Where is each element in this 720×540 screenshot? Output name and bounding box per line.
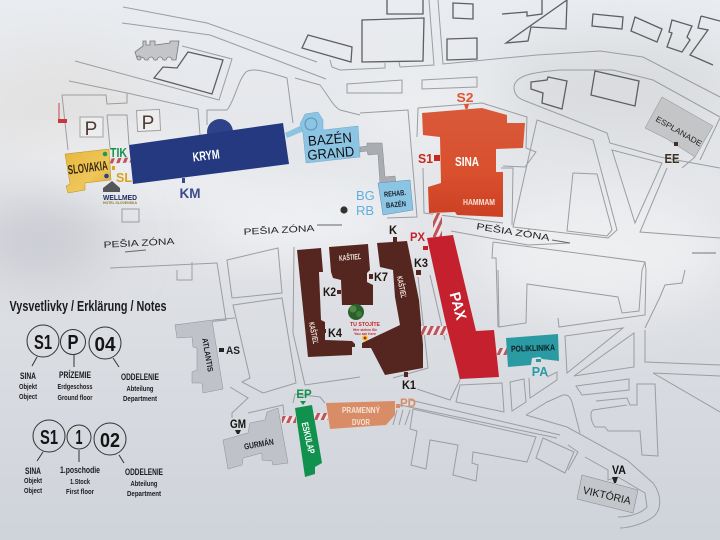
building: Kaštieľ: KAŠTIEĽ [395, 275, 408, 299]
labels: Kaštieľ entrances: K1 [402, 378, 416, 392]
building: Rehab bazén [378, 180, 413, 215]
building: Pramenný dvor: DVOR [352, 418, 370, 427]
building: Viktória [577, 475, 638, 513]
pool corridor [360, 143, 396, 184]
labels: Kaštieľ entrances: K2 [323, 285, 336, 299]
label: Pešia zóna centre [243, 223, 342, 237]
logo: WellMed: WELLMED [103, 193, 138, 202]
labels: Kaštieľ entrances: K4 [328, 326, 342, 340]
building: Sina [422, 108, 525, 217]
building: Poliklinika: POLIKLINIKA [511, 342, 555, 354]
legend example 1 text [19, 370, 159, 403]
you are here: You are here [354, 332, 376, 336]
legend example 2 text: First floor [66, 489, 94, 496]
building: Rehab bazén: BAZÉN [386, 199, 406, 210]
legend example 1 codes: P [68, 332, 78, 354]
legend example 2 text: Abteilung [130, 481, 158, 488]
building: Sina: HAMMAM [463, 197, 495, 207]
building: Gurmán [223, 408, 288, 469]
logo: WellMed [103, 181, 138, 205]
label: Pešia zóna centre: PEŠIA ZÓNA [243, 223, 315, 237]
legend example 2 text: 1.Stock [70, 479, 90, 486]
legend example 2 text: Department [127, 491, 162, 498]
legend example 2 circles [33, 420, 126, 463]
legend example 2 text: Objekt [24, 478, 43, 485]
label: EE [664, 142, 680, 166]
legend example 1 text: ODDELENIE [121, 372, 159, 382]
building: Kaštieľ [297, 241, 423, 375]
labels: BG RB: BG [356, 188, 375, 203]
label: S1 [418, 152, 440, 166]
arrow: far right [692, 252, 716, 254]
legend example 2 codes: 1 [76, 427, 82, 449]
legend example 2 text: ODDELENIE [125, 467, 163, 477]
label: SL: SL [116, 171, 132, 185]
tree [348, 304, 364, 320]
legend example 1 text: PRÍZEMIE [59, 370, 91, 380]
building: Atlantis: ATLANTIS [200, 337, 215, 373]
you are here: Hier stehen Sie [353, 328, 377, 332]
building: Rehab bazén: REHAB. [384, 188, 406, 199]
building: Bazén Grand: BAZÉN [307, 129, 353, 149]
legend example 2 codes: S1 [40, 427, 58, 449]
label: S1: S1 [418, 152, 433, 166]
label: Pešia zóna left [103, 236, 175, 252]
legend example 1 text: SINA [20, 371, 36, 381]
logo: WellMed: HOTEL SLOVENSKA [103, 201, 137, 205]
legend example 2 codes: 02 [100, 430, 120, 452]
building: Atlantis [175, 320, 223, 393]
labels: BG RB: RB [356, 203, 374, 218]
legend example 2 text: SINA [25, 466, 41, 476]
legend example 2 text [24, 465, 163, 498]
legend example 2 codes [40, 427, 120, 452]
label: S2: S2 [456, 90, 474, 105]
legend example 1 text: Object [19, 394, 38, 401]
building: Esplanade: ESPLANADE [654, 115, 704, 148]
parking P 2 [136, 109, 161, 134]
parking P 1 [80, 117, 103, 140]
legend example 1 circles [27, 325, 121, 367]
building: Eskulap: ESKULAP [299, 421, 317, 455]
label: PD: PD [400, 398, 416, 410]
labels: Kaštieľ entrances: K [389, 223, 397, 237]
building: Bazén Grand: GRAND [307, 143, 355, 163]
building: Krym [129, 119, 289, 184]
label: VA [612, 463, 626, 483]
label: AS [219, 345, 240, 357]
label: PX [410, 230, 428, 250]
label: Pešia zóna right: PEŠIA ZÓNA [476, 221, 550, 243]
legend example 2 text: 1.poschodie [60, 465, 100, 475]
parking P 2: P [142, 113, 154, 134]
building: Slovakia: SLOVAKIA [67, 158, 109, 177]
building: Slovakia [65, 149, 111, 193]
label: Pešia zóna left: PEŠIA ZÓNA [103, 236, 175, 250]
labels: BG RB [356, 188, 375, 218]
legend example 1 codes: 04 [94, 334, 116, 356]
building: Krym: KRYM [192, 146, 220, 165]
building: Pax [427, 235, 499, 379]
building: Bazén Grand [285, 112, 360, 163]
you are here: TU STOJÍTE [350, 320, 380, 328]
legend example 1 text: Erdgeschoss [58, 384, 93, 391]
label: PX: PX [410, 230, 425, 244]
building: Poliklinika [506, 334, 559, 367]
label: EP: EP [296, 389, 312, 401]
building: Pramenný dvor [326, 401, 395, 429]
label: EE: EE [664, 152, 680, 166]
legend title: Vysvetlivky / Erklärung / Notes [10, 298, 166, 315]
labels: Kaštieľ entrances: K3 [414, 256, 428, 270]
label: PA: PA [532, 365, 548, 379]
connector: Slovakia to Krym [110, 157, 131, 164]
legend example 1 codes [34, 332, 116, 356]
connector: Eskulap to Pramenný [314, 413, 328, 420]
connector: Gurmán to Eskulap [282, 416, 296, 423]
label: GM: GM [230, 417, 246, 431]
building: Sina: SINA [455, 154, 479, 169]
legend example 1 text: Abteilung [126, 386, 154, 393]
labels: Kaštieľ entrances: K7 [374, 270, 388, 284]
building: Pax: PAX [446, 290, 469, 322]
label: TIK: TIK [110, 146, 127, 160]
dot marker [340, 206, 348, 214]
label: AS: AS [226, 345, 240, 357]
labels: Kaštieľ entrances [322, 223, 428, 392]
legend example 2 text: Object [24, 488, 43, 495]
parking P 1: P [85, 119, 97, 140]
red marker [58, 103, 67, 123]
legend example 1 codes: S1 [34, 332, 52, 354]
label: KM [180, 178, 200, 201]
legend example 1 text: Ground floor [58, 395, 93, 402]
building: Pramenný dvor: PRAMENNÝ [342, 406, 381, 415]
label: KM: KM [180, 186, 200, 201]
building: Viktória: VIKTÓRIA [582, 484, 632, 507]
icon: locomotive [135, 41, 179, 60]
label: Pešia zóna right [476, 221, 570, 243]
map: neighbouring building outlines [122, 0, 720, 222]
connector: Sina to Pax [433, 213, 442, 237]
you are here [350, 320, 380, 341]
legend [10, 298, 166, 498]
building: Eskulap [295, 405, 322, 477]
building: Esplanade [645, 97, 713, 157]
connector: Kaštieľ to Pax [421, 326, 447, 335]
legend example 1 text: Objekt [19, 384, 38, 391]
building: Gurmán: GURMÁN [243, 436, 274, 452]
connector: Pax to Poliklinika [497, 348, 507, 355]
legend example 1 text: Department [123, 396, 158, 403]
label: SL [112, 166, 132, 185]
label: VA: VA [612, 463, 626, 477]
building: Kaštieľ: KAŠTIEĽ [339, 252, 361, 263]
building: Kaštieľ: KAŠTIEĽ [307, 321, 320, 345]
